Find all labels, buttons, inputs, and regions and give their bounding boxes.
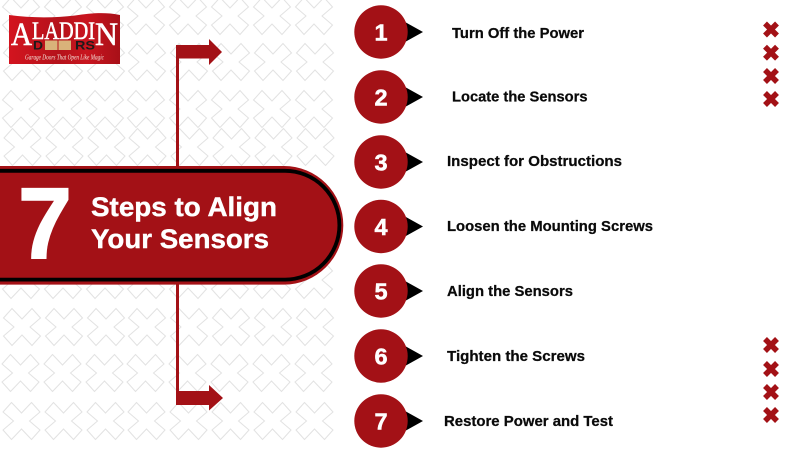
background pattern (2, 0, 334, 440)
logo: Aladdin Doors: LADDI (32, 18, 95, 45)
step 3 (354, 135, 622, 189)
step 2 (354, 70, 588, 124)
big number 7: 7 (18, 168, 72, 280)
arrow: bottom connector (176, 284, 223, 410)
step 5: Align the Sensors (447, 284, 573, 300)
step 4: 4 (374, 214, 388, 240)
decorative crosses: bottom right (765, 339, 777, 421)
decorative crosses: top right (765, 24, 777, 105)
title (91, 192, 277, 254)
step 5: 5 (374, 278, 388, 304)
step 4 (354, 200, 653, 253)
step 7: 7 (374, 408, 388, 434)
step 2: Locate the Sensors (452, 90, 588, 106)
step 7: Restore Power and Test (444, 414, 613, 430)
step 5 (354, 264, 573, 318)
logo: Aladdin Doors: A (11, 17, 32, 53)
banner (0, 166, 343, 285)
arrow: top connector (176, 39, 222, 166)
step 3: Inspect for Obstructions (447, 154, 622, 170)
step 2: 2 (374, 84, 388, 110)
step 4: Loosen the Mounting Screws (447, 219, 653, 235)
title: Steps to Align (91, 192, 277, 222)
step 7 (354, 394, 613, 448)
step 1: 1 (374, 20, 388, 46)
logo: Aladdin Doors (9, 13, 120, 64)
title: Your Sensors (91, 224, 269, 254)
logo: Aladdin Doors: RS (75, 38, 95, 52)
logo: Aladdin Doors: D (33, 38, 43, 52)
step 1 (354, 5, 584, 59)
step 6 (354, 329, 585, 383)
step 3: 3 (374, 150, 388, 176)
step 1: Turn Off the Power (452, 26, 584, 42)
step 6: Tighten the Screws (447, 349, 585, 365)
logo: Aladdin Doors: N (95, 17, 118, 53)
logo: Aladdin Doors: Garage Doors That Open Like Magic (25, 54, 105, 62)
step 6: 6 (374, 344, 388, 370)
